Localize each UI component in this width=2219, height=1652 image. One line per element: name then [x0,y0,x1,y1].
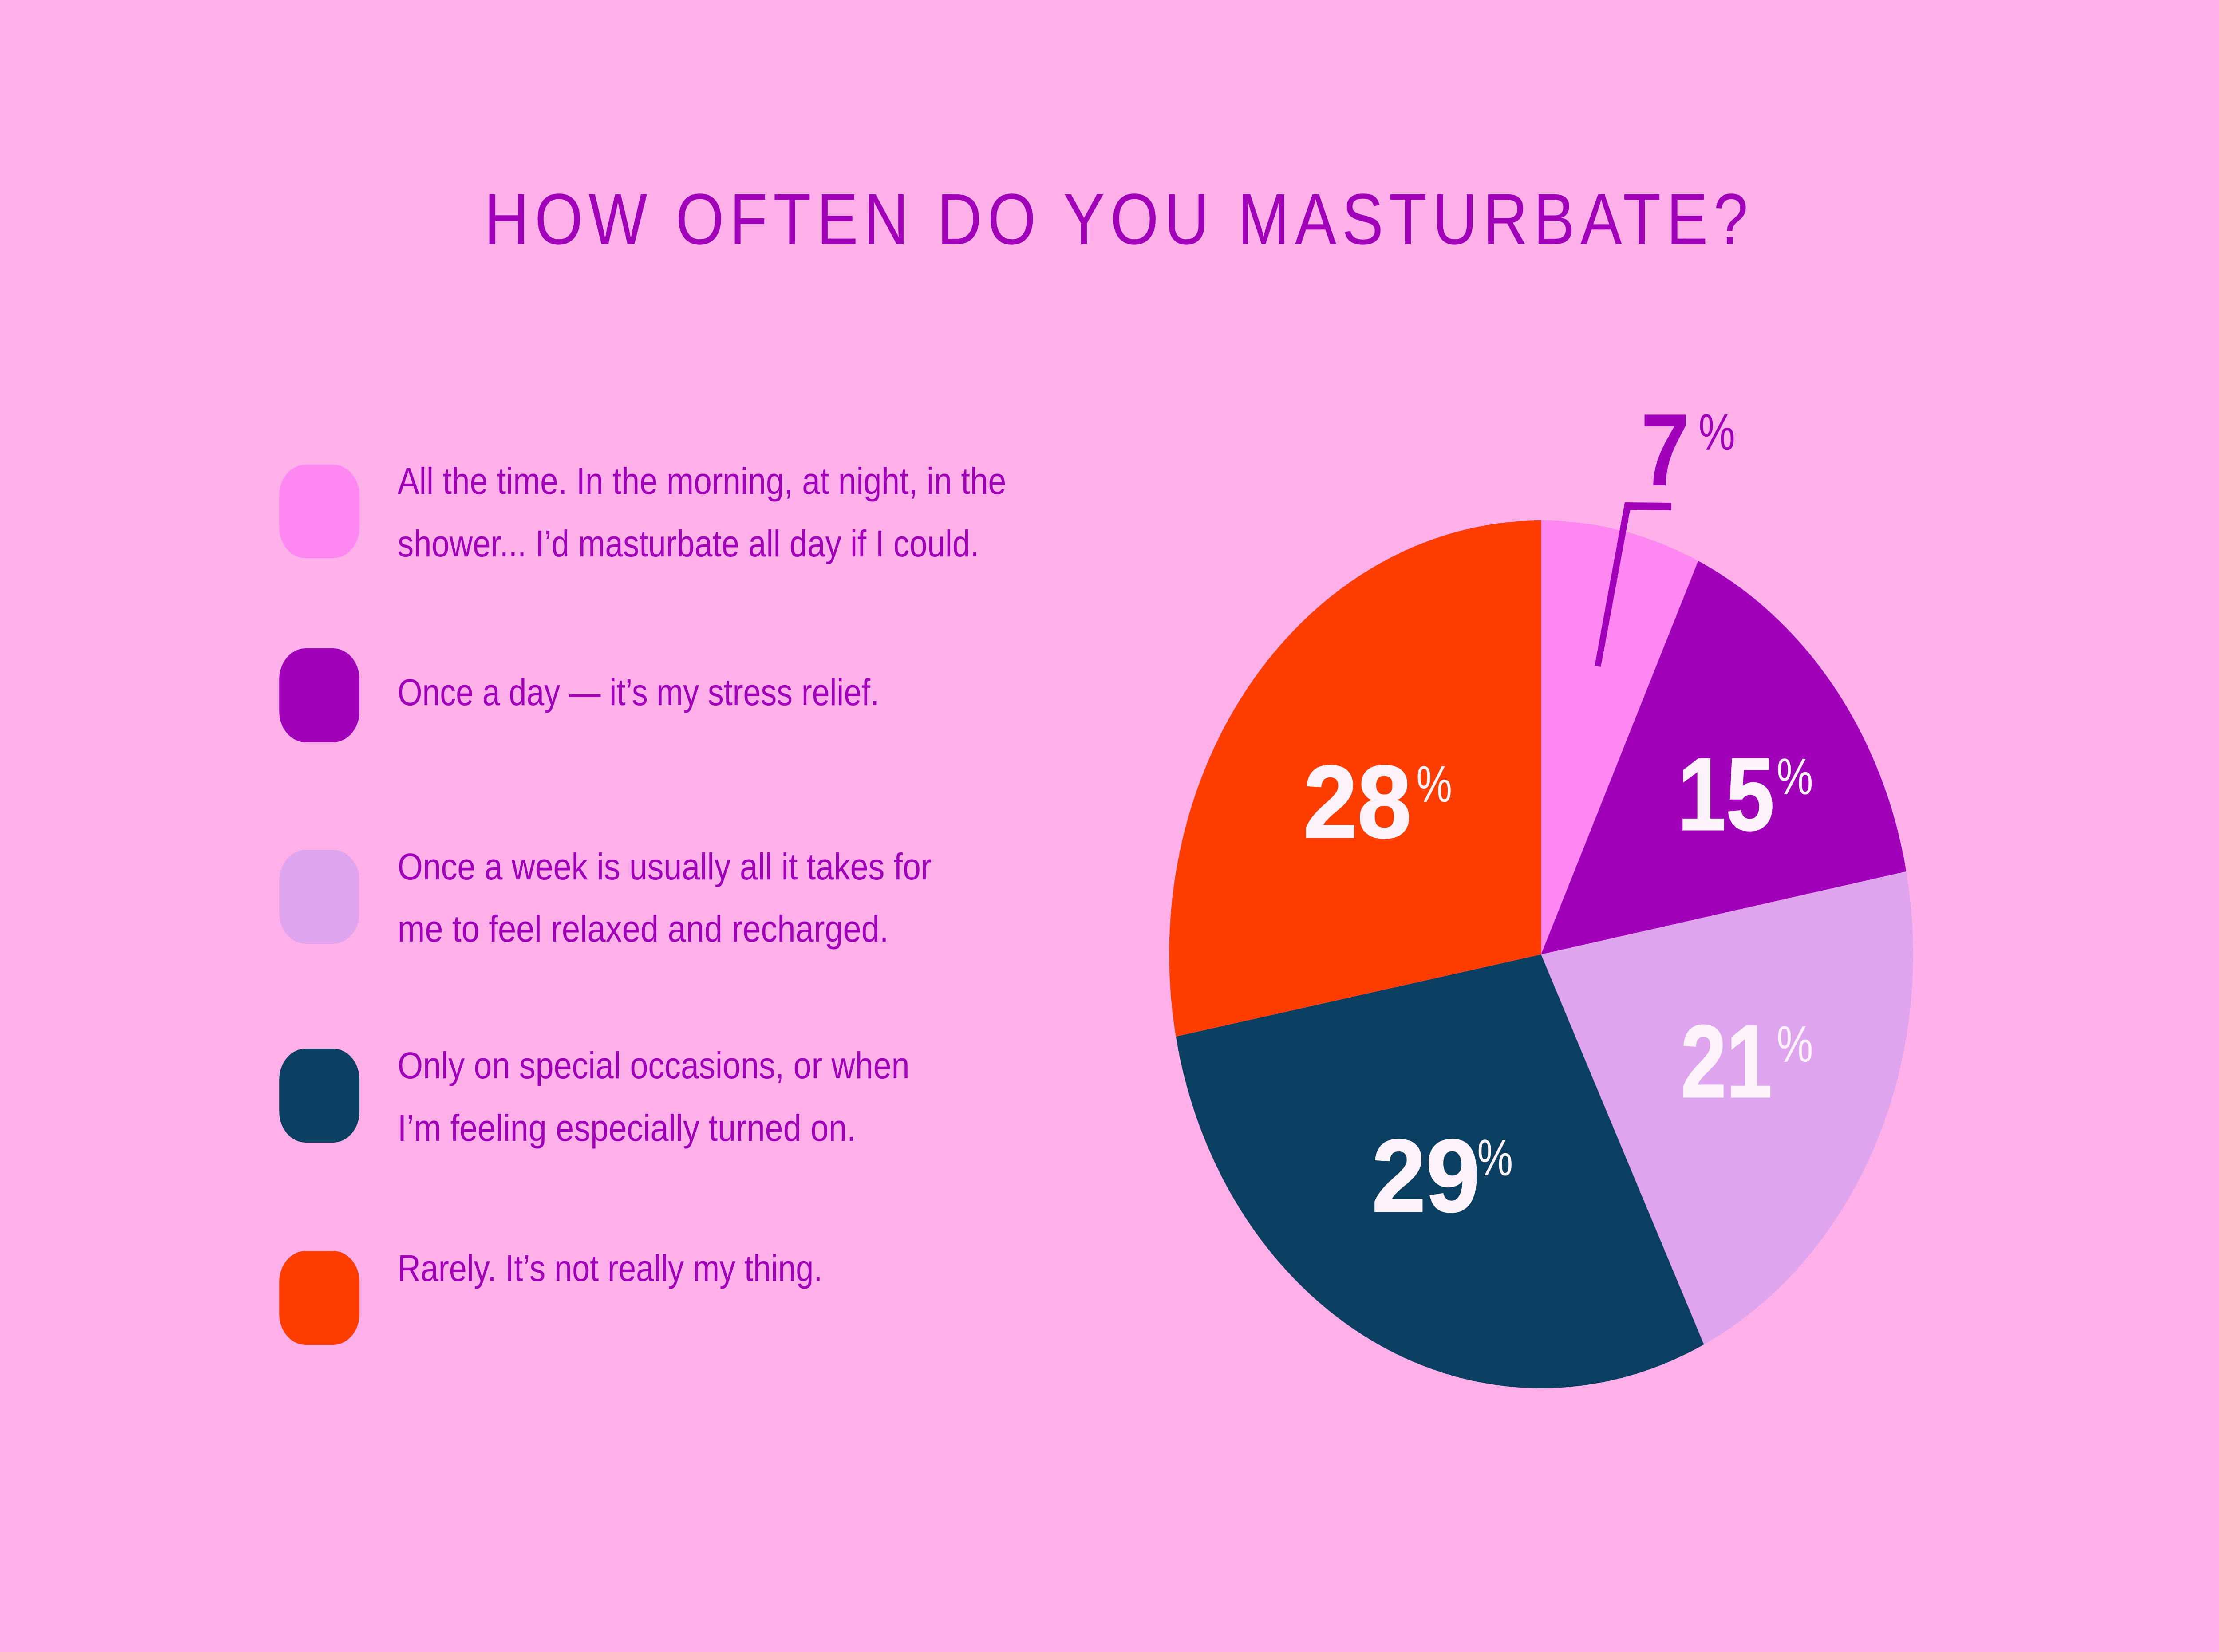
value label: 15%: % [1777,748,1813,805]
legend item: once a week [279,846,932,950]
swatch: purple [279,648,359,742]
legend text: all the time [398,460,1006,564]
legend text: special occasions: Only on special occasions, or when [398,1045,910,1086]
legend item: rarely [279,1247,822,1345]
legend text: once a day: Once a day — it’s my stress relief. [398,671,879,713]
slice: 29% navy [1176,954,1704,1388]
legend item: all the time [279,460,1006,564]
legend text: once a week: me to feel relaxed and recharged. [398,908,888,950]
legend text: once a week: Once a week is usually all it takes for [398,846,932,887]
swatch: lilac [279,850,359,944]
value label: 7%: 7 [1641,392,1690,507]
legend item: special occasions [279,1045,910,1149]
value label: 29%: % [1477,1129,1513,1187]
value label: 29% [1372,1118,1513,1233]
legend text: all the time: shower... I’d masturbate all day if I could. [398,523,979,564]
value label: 21%: 21 [1681,1004,1772,1119]
legend text: rarely: Rarely. It’s not really my thing. [398,1247,822,1289]
value label: 7% [1641,392,1735,507]
swatch: pink [279,465,359,558]
slice: 7% pink [1541,520,1698,954]
legend text: all the time: All the time. In the morning, at night, in the [398,460,1006,502]
slice: 21% lilac [1541,871,1913,1344]
leader line for 7% [1595,502,1671,667]
value label: 28%: 28 [1303,744,1411,859]
value label: 21%: % [1777,1015,1813,1073]
slice: 15% purple [1541,561,1906,954]
value label: 29%: 29 [1372,1118,1480,1233]
slice: 28% orange [1169,520,1541,1037]
legend [279,460,1006,1345]
title: HOW OFTEN DO YOU MASTURBATE? [484,179,1748,260]
value label: 7%: % [1698,403,1735,461]
swatch: orange [279,1251,359,1345]
value label: 28%: % [1416,755,1452,813]
value label: 28% [1303,744,1452,859]
legend text: special occasions [398,1045,910,1149]
legend text: special occasions: I’m feeling especially turned on. [398,1107,856,1149]
legend text: once a week [398,846,932,950]
pie chart [1169,392,1913,1388]
value label: 15%: 15 [1678,737,1774,852]
legend item: once a day [279,648,879,742]
swatch: navy [279,1049,359,1143]
